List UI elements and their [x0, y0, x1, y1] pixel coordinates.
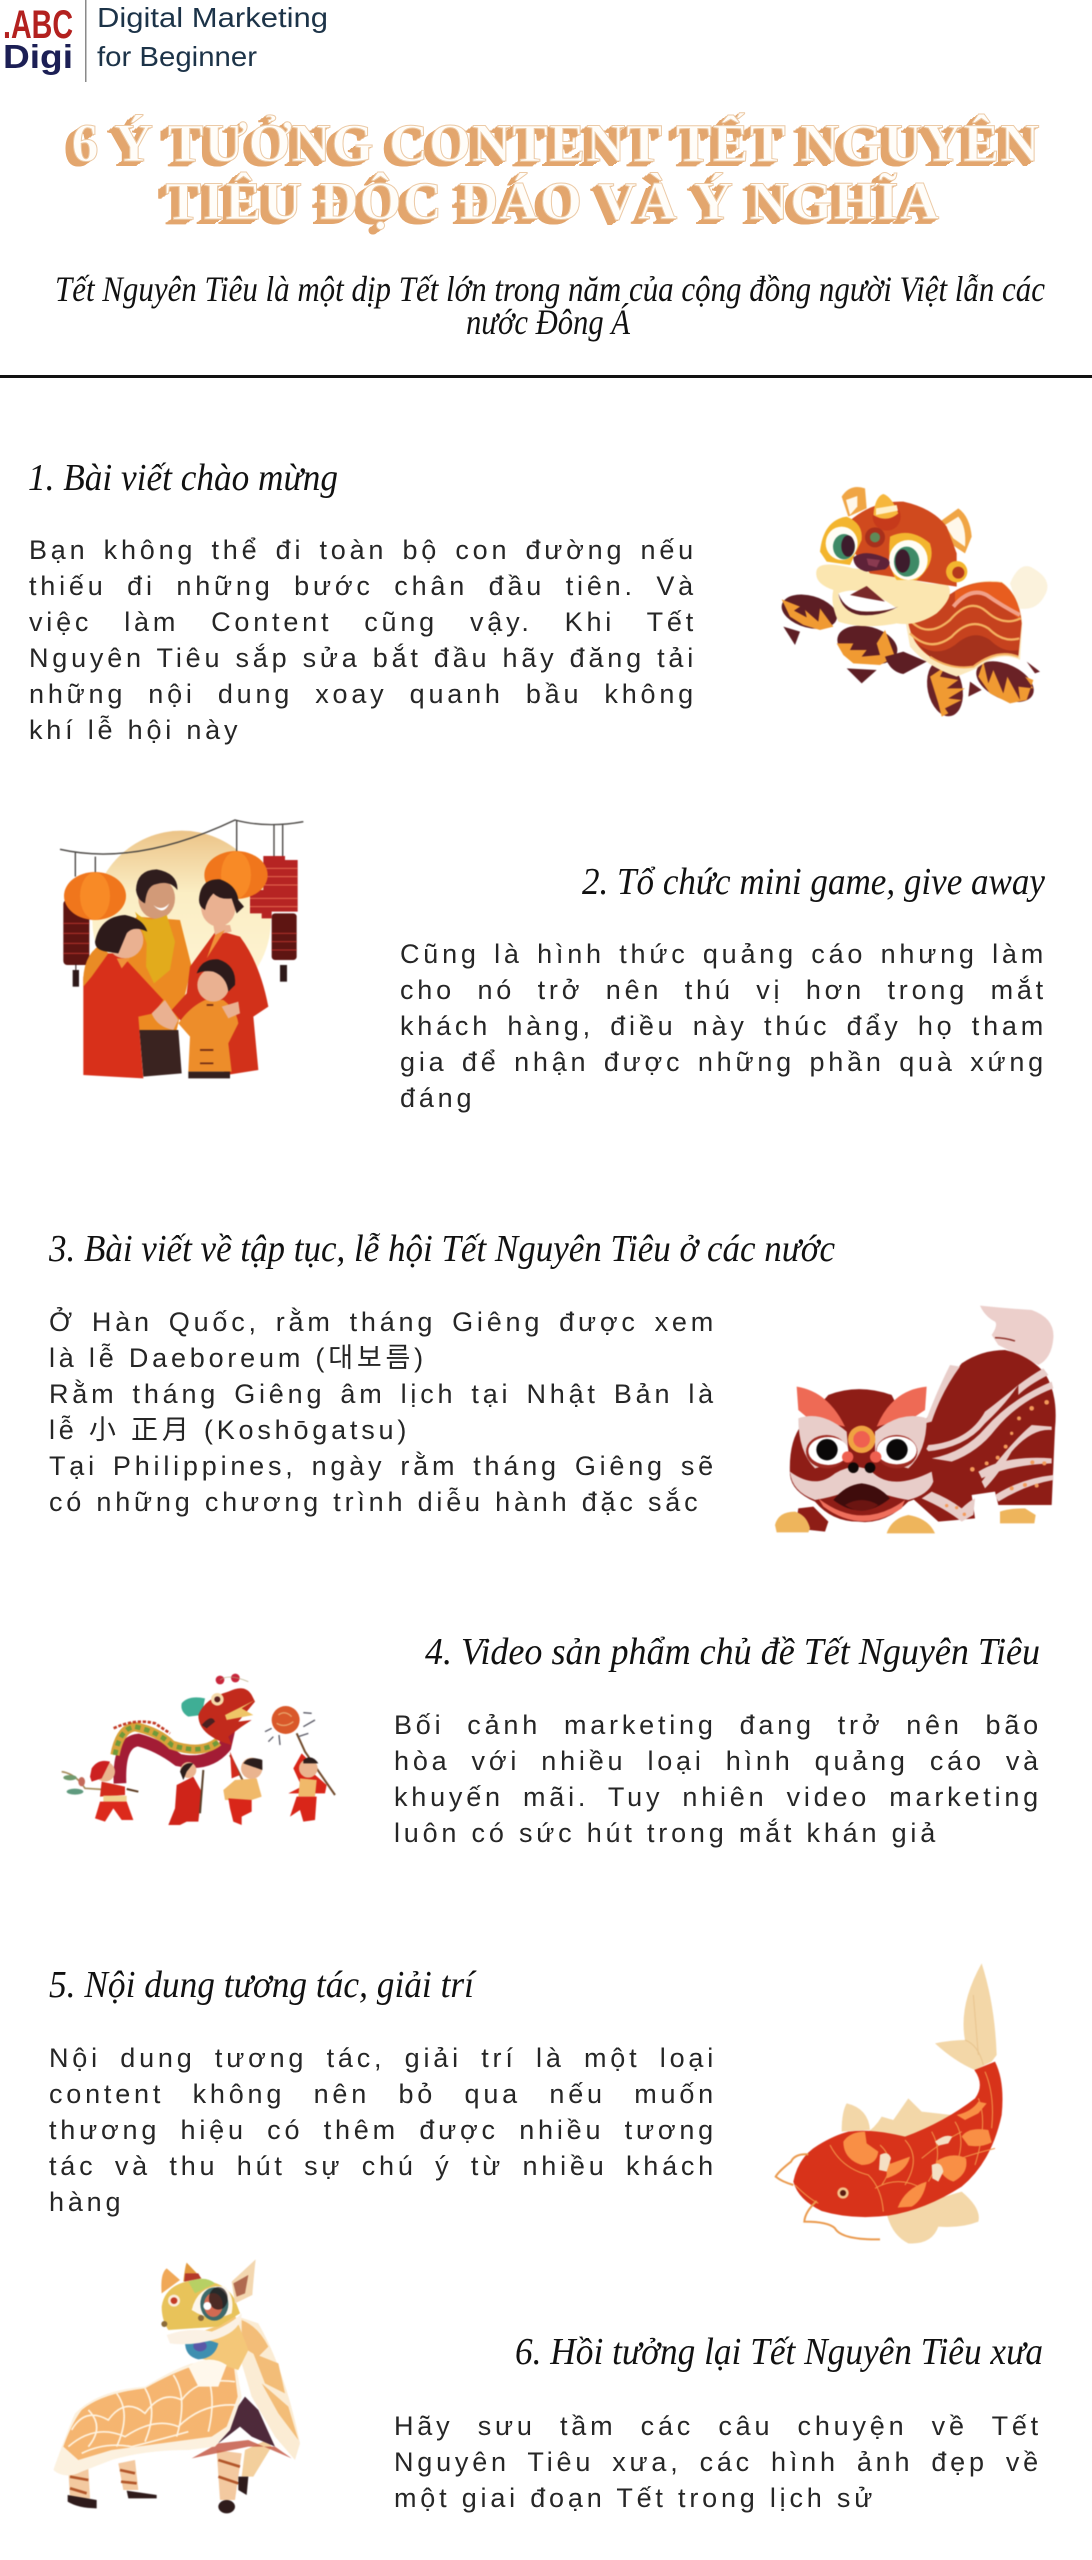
ears — [842, 487, 972, 553]
text 2: Cũng là hình thức quảng cáo nhưng làm — [400, 939, 1047, 969]
logo: Digital Marketing — [97, 2, 328, 33]
body — [53, 2360, 242, 2475]
rear legs — [922, 653, 1040, 720]
text 3 — [49, 1307, 717, 1517]
icon: family with lanterns — [59, 818, 304, 1080]
paws — [795, 1507, 828, 1532]
eyes — [820, 517, 932, 580]
logo: .ABC — [3, 3, 73, 47]
text 5 — [49, 2043, 717, 2217]
text 3: là lễ Daeboreum (대보름) — [49, 1343, 427, 1373]
logo — [3, 0, 328, 82]
icon: red paper lion — [774, 1305, 1056, 1534]
text 2 — [400, 939, 1047, 1113]
right lanterns — [204, 851, 298, 982]
person 4 with ball — [265, 1706, 335, 1822]
mother — [172, 879, 268, 1075]
text 1: khí lễ hội này — [29, 715, 241, 745]
divider — [0, 375, 1092, 378]
father — [122, 869, 192, 1077]
grandmother in red — [83, 915, 163, 1078]
icon: koi fish — [774, 1964, 1004, 2244]
text 5: content không nên bỏ qua nếu muốn — [49, 2079, 717, 2109]
text 6 — [394, 2411, 1042, 2513]
text 1: thiếu đi những bước chân đầu tiên. Và — [29, 571, 697, 601]
text 2: gia để nhận được những phần quà xứng — [400, 1047, 1047, 1077]
mane — [188, 2307, 248, 2370]
text 6: Nguyên Tiêu xưa, các hình ảnh đẹp về — [394, 2447, 1042, 2477]
text 2: khách hàng, điều này thúc đẩy họ tham — [400, 1011, 1047, 1041]
person 2 — [168, 1762, 203, 1825]
text 1: những nội dung xoay quanh bầu không — [29, 679, 697, 709]
whiskers — [776, 2154, 880, 2239]
text 5: thương hiệu có thêm được nhiều tương — [49, 2115, 717, 2145]
text 5: Nội dung tương tác, giải trí là một loại — [49, 2043, 717, 2073]
logo: for Beginner — [97, 41, 257, 72]
subtitle — [55, 269, 1045, 342]
head — [161, 2259, 256, 2344]
legs — [68, 2440, 272, 2513]
person 3 — [223, 1752, 262, 1825]
text 2: đáng — [400, 1083, 475, 1113]
body — [905, 1350, 1056, 1522]
text 5: hàng — [49, 2187, 124, 2217]
text 1: việc làm Content cũng vậy. Khi Tết — [29, 607, 697, 637]
blue tongue — [185, 2340, 218, 2359]
patches — [843, 2102, 992, 2208]
icon: orange lion dance — [780, 486, 1048, 718]
text 1: Nguyên Tiêu sắp sửa bắt đầu hãy đăng tải — [29, 643, 697, 673]
logo: Digi — [3, 38, 73, 75]
text 4: luôn có sức hút trong mắt khán giả — [394, 1818, 939, 1848]
text 3: Tại Philippines, ngày rằm tháng Giêng sẽ — [49, 1451, 717, 1481]
icon: dragon dance — [61, 1672, 336, 1826]
text 4: hòa với nhiều loại hình quảng cáo và — [394, 1746, 1042, 1776]
title: 6 Ý TƯỞNG CONTENT TẾT NGUYÊN — [72, 113, 1040, 173]
text 1 — [29, 535, 697, 745]
title — [65, 112, 1040, 234]
text 6: một giai đoạn Tết trong lịch sử — [394, 2483, 876, 2513]
text 1: Bạn không thể đi toàn bộ con đường nếu — [29, 535, 697, 565]
text 4: khuyến mãi. Tuy nhiên video marketing — [394, 1782, 1042, 1812]
text 2: cho nó trở nên thú vị hơn trong mắt — [400, 975, 1047, 1005]
icon: golden lion — [54, 2260, 300, 2514]
subtitle: nước Đông Á — [466, 302, 631, 342]
front paws — [778, 589, 927, 683]
text 3: Ở Hàn Quốc, rằm tháng Giêng được xem — [49, 1307, 717, 1337]
left lanterns — [63, 872, 126, 987]
text 3: Rằm tháng Giêng âm lịch tại Nhật Bản là — [49, 1379, 717, 1409]
boy — [152, 959, 240, 1078]
text 6: Hãy sưu tầm các câu chuyện về Tết — [394, 2411, 1042, 2441]
head — [790, 1389, 933, 1522]
text 4: Bối cảnh marketing đang trở nên bão — [394, 1710, 1042, 1740]
dragon body — [120, 1725, 230, 1783]
forehead — [843, 502, 957, 587]
text 4 — [394, 1710, 1042, 1848]
cape on the right — [238, 2317, 300, 2460]
scales — [830, 2072, 995, 2212]
person 1 — [62, 1761, 138, 1822]
title: TIÊU ĐỘC ĐÁO VÀ Ý NGHĨA — [165, 171, 941, 231]
text 5: tác và thu hút sự chú ý từ nhiều khách — [49, 2151, 717, 2181]
dragon head — [181, 1674, 255, 1745]
scale lines — [68, 2365, 235, 2453]
tail and fins — [842, 1963, 997, 2243]
body — [793, 2062, 1002, 2217]
mane and muzzle — [816, 565, 950, 626]
text 3: có những chương trình diễu hành đặc sắc — [49, 1487, 701, 1517]
text 3: lễ 小 正月 (Koshōgatsu) — [49, 1415, 410, 1445]
brows and ears — [797, 1387, 927, 1473]
